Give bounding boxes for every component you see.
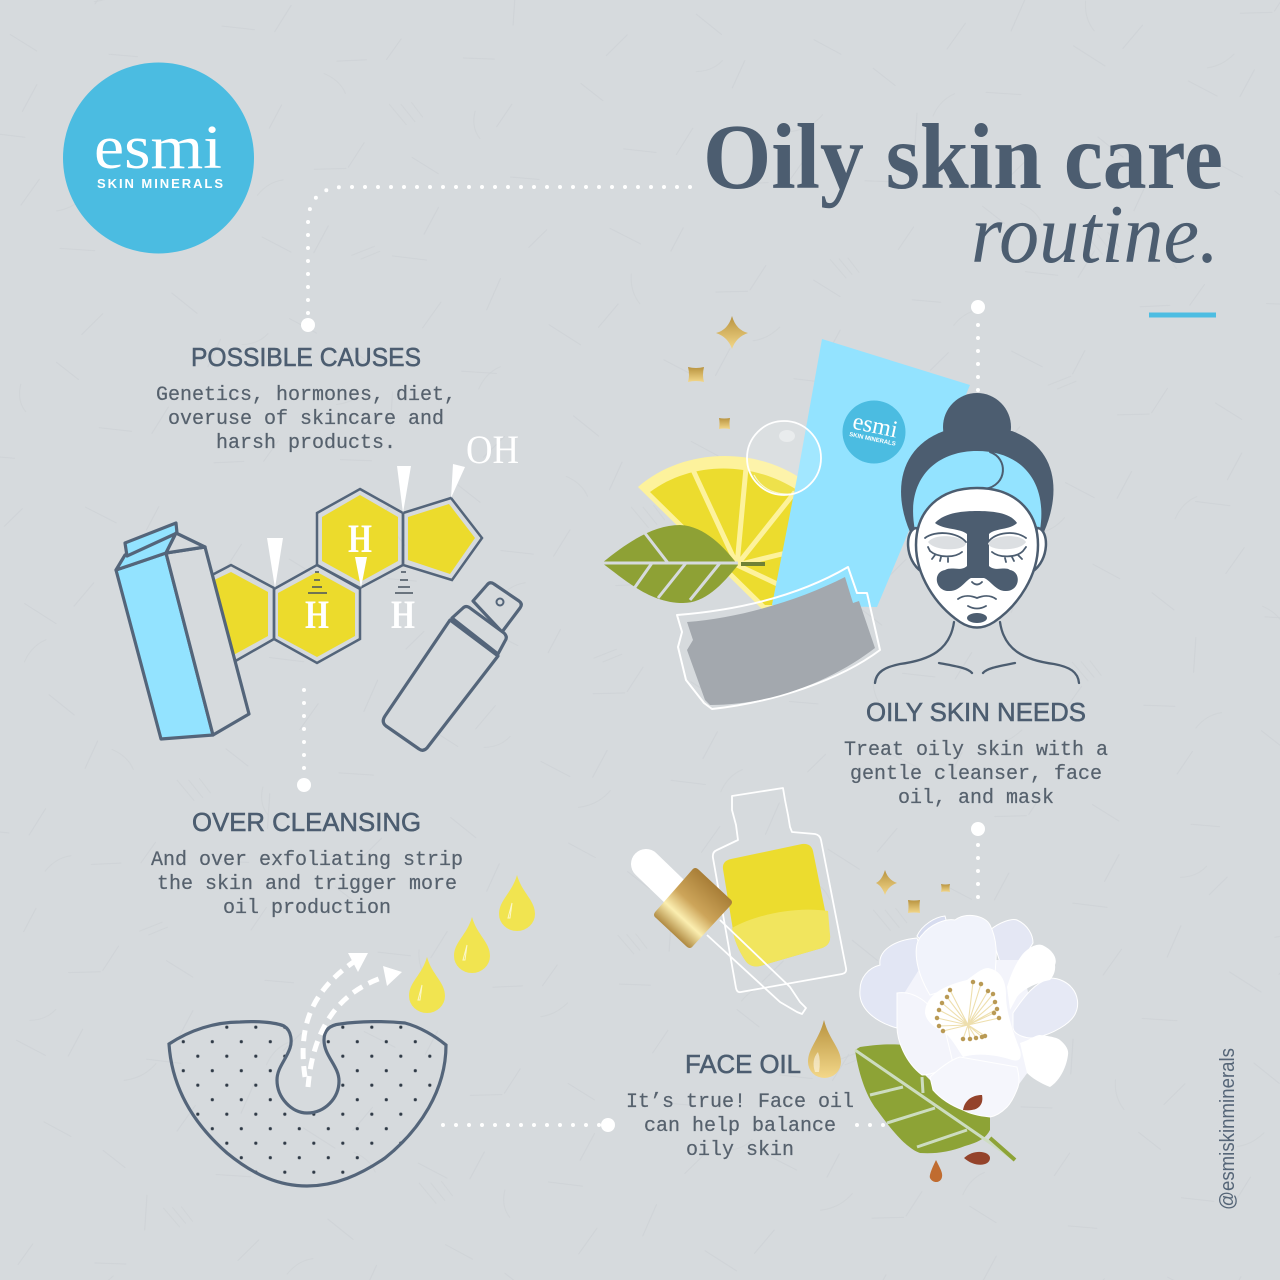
handle: social media: @esmiskinminerals bbox=[1217, 1048, 1239, 1210]
text block: over cleansing: oil production bbox=[223, 897, 391, 920]
text block: over cleansing: the skin and trigger more bbox=[157, 873, 457, 896]
illustration: lemon slice bbox=[638, 456, 800, 610]
icon: golden oil drop bbox=[808, 1020, 841, 1078]
illustration: skin pore bbox=[169, 1022, 446, 1186]
text block: oily skin needs: OILY SKIN NEEDS bbox=[866, 697, 1086, 727]
text block: oily skin needs: gentle cleanser, face bbox=[850, 763, 1102, 786]
illustration: hormone molecule: H bbox=[391, 592, 415, 637]
logo: esmi skin minerals: esmi bbox=[94, 114, 222, 182]
title bbox=[703, 106, 1223, 281]
illustration: bubble bbox=[747, 421, 821, 495]
illustration: hormone molecule bbox=[212, 427, 519, 667]
accent line bbox=[1149, 312, 1216, 318]
icon: sparkles bbox=[688, 316, 950, 913]
connector: dotted lines bbox=[297, 187, 985, 1132]
illustration: green leaf bbox=[602, 525, 765, 603]
illustration: cleanser tube: SKIN MINERALS bbox=[849, 432, 896, 448]
illustration: cream jar bbox=[677, 567, 880, 709]
icon: milk carton bbox=[116, 523, 249, 739]
text block: face oil: FACE OIL bbox=[685, 1049, 801, 1079]
illustration: hormone molecule: OH bbox=[466, 427, 519, 472]
title: Oily skin care bbox=[703, 106, 1223, 209]
text block: over cleansing bbox=[151, 807, 463, 920]
text block: possible causes: harsh products. bbox=[216, 432, 396, 455]
icon: spray bottle bbox=[383, 583, 521, 750]
text block: possible causes: Genetics, hormones, diet, bbox=[156, 384, 456, 407]
text block: possible causes: overuse of skincare and bbox=[168, 408, 444, 431]
logo: esmi skin minerals: SKIN MINERALS bbox=[97, 176, 223, 191]
text block: possible causes: POSSIBLE CAUSES bbox=[191, 342, 421, 372]
text block: oily skin needs: Treat oily skin with a bbox=[844, 739, 1108, 762]
text block: possible causes bbox=[156, 342, 456, 455]
text block: face oil: It’s true! Face oil bbox=[626, 1091, 854, 1114]
illustration: cleanser tube: esmi bbox=[850, 409, 900, 444]
illustration: hormone molecule: H bbox=[305, 592, 329, 637]
arrows: oil rising bbox=[303, 953, 402, 1087]
text block: over cleansing: And over exfoliating strip bbox=[151, 849, 463, 872]
illustration: camellia leaf bbox=[855, 1044, 1015, 1160]
title: routine. bbox=[971, 188, 1219, 281]
illustration: camellia seeds bbox=[930, 1095, 990, 1182]
illustration: woman wearing face mask bbox=[875, 393, 1079, 683]
text block: oily skin needs: oil, and mask bbox=[898, 787, 1054, 810]
illustration: hormone molecule: H bbox=[348, 516, 372, 561]
text block: face oil: can help balance bbox=[644, 1115, 836, 1138]
illustration: serum bottle with dropper bbox=[646, 788, 846, 1014]
illustration: cleanser tube bbox=[772, 339, 970, 607]
text block: face oil: oily skin bbox=[686, 1139, 794, 1162]
text block: face oil bbox=[626, 1049, 854, 1162]
logo: esmi skin minerals bbox=[63, 62, 254, 254]
text block: oily skin needs bbox=[844, 697, 1108, 810]
illustration: white camellia flower bbox=[860, 915, 1078, 1117]
icon: oil drops bbox=[409, 875, 535, 1013]
text block: over cleansing: OVER CLEANSING bbox=[192, 807, 421, 837]
